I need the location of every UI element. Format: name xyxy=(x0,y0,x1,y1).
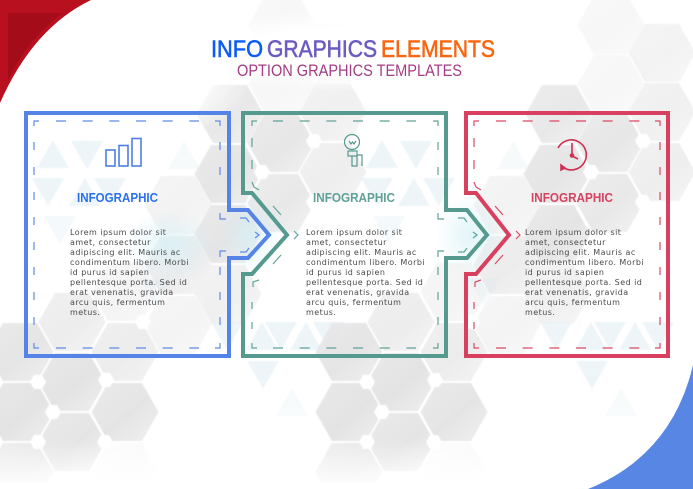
green body text: adipiscing elit. Mauris ac xyxy=(306,248,417,257)
red body text: adipiscing elit. Mauris ac xyxy=(525,248,636,257)
red body text: amet, consectetur xyxy=(525,238,606,247)
red panel dashed inner frame xyxy=(474,121,660,348)
green body text xyxy=(306,228,425,317)
blue panel outline xyxy=(26,113,269,356)
green panel dashed inner frame xyxy=(252,121,477,348)
red body text: Lorem ipsum dolor sit xyxy=(525,228,621,237)
green panel outline xyxy=(243,113,487,356)
green body text: arcu quis, fermentum xyxy=(306,298,401,307)
red body text xyxy=(525,228,644,317)
red body text: arcu quis, fermentum xyxy=(525,298,620,307)
green body text: id purus id sapien xyxy=(306,268,385,277)
red body text: condimentum libero. Morbi xyxy=(525,258,644,267)
panel: blue xyxy=(26,113,269,356)
blue body text: metus. xyxy=(70,308,100,317)
title: INFO xyxy=(211,36,263,63)
corner: red top-left shape xyxy=(0,0,91,103)
green heading: INFOGRAPHIC xyxy=(313,190,396,205)
blue body text: amet, consectetur xyxy=(70,238,151,247)
blue panel dashed inner frame xyxy=(34,121,259,348)
blue heading: INFOGRAPHIC xyxy=(77,190,159,205)
panel: green xyxy=(243,113,487,356)
red body text: metus. xyxy=(525,308,555,317)
blue body text xyxy=(70,228,189,317)
icon: bar chart xyxy=(106,138,141,166)
green body text: condimentum libero. Morbi xyxy=(306,258,425,267)
green body text: amet, consectetur xyxy=(306,238,387,247)
blue body text: adipiscing elit. Mauris ac xyxy=(70,248,181,257)
panel: red xyxy=(466,113,668,356)
red body text: pellentesque porta. Sed id xyxy=(525,278,642,287)
corner: blue bottom-right shape xyxy=(588,365,693,489)
title: ELEMENTS xyxy=(381,36,495,63)
green body text: erat venenatis, gravida xyxy=(306,288,410,297)
icon: light bulb xyxy=(344,134,362,166)
red body text: id purus id sapien xyxy=(525,268,604,277)
icon: clock with arrow xyxy=(558,140,586,170)
blue body text: arcu quis, fermentum xyxy=(70,298,165,307)
blue body text: pellentesque porta. Sed id xyxy=(70,278,187,287)
green body text: pellentesque porta. Sed id xyxy=(306,278,423,287)
blue body text: erat venenatis, gravida xyxy=(70,288,174,297)
green body text: Lorem ipsum dolor sit xyxy=(306,228,402,237)
green body text: metus. xyxy=(306,308,336,317)
title xyxy=(211,36,495,63)
blue body text: Lorem ipsum dolor sit xyxy=(70,228,166,237)
red panel outline xyxy=(466,113,668,356)
blue body text: condimentum libero. Morbi xyxy=(70,258,189,267)
subtitle: OPTION GRAPHICS TEMPLATES xyxy=(237,62,462,80)
red body text: erat venenatis, gravida xyxy=(525,288,629,297)
title: GRAPHICS xyxy=(267,36,377,63)
red heading: INFOGRAPHIC xyxy=(531,190,614,205)
blue body text: id purus id sapien xyxy=(70,268,149,277)
